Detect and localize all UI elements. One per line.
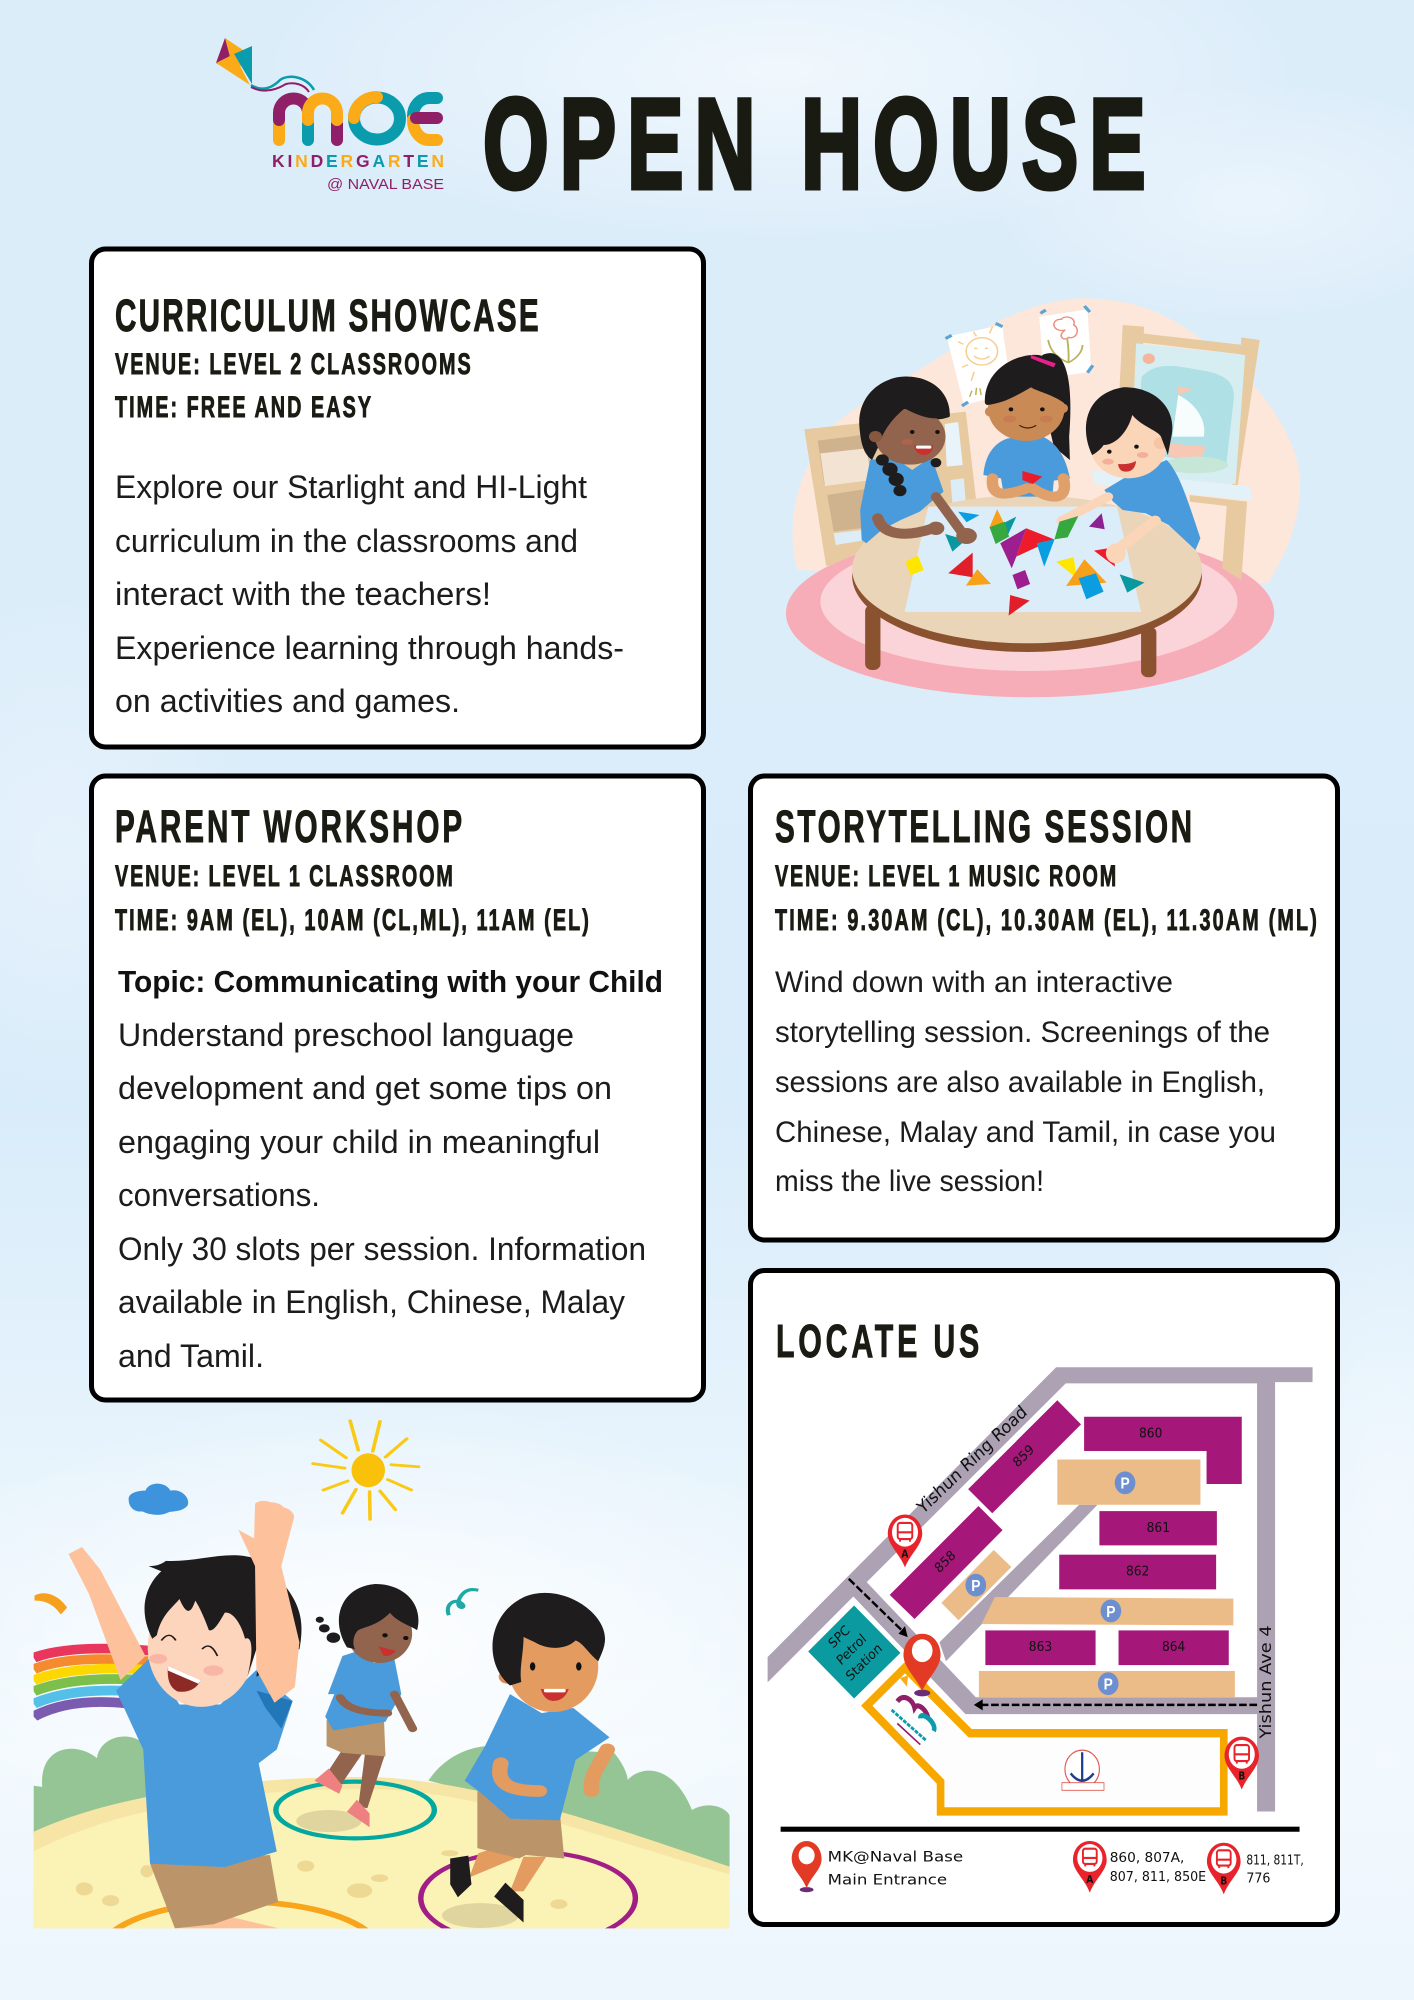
ground <box>34 1777 731 1928</box>
illustration: children playing tangram at a table <box>786 298 1300 697</box>
ground pebbles <box>76 1850 567 1909</box>
legend: main entrance <box>792 1841 963 1892</box>
legend: main entrance: MK@Naval Base <box>828 1849 963 1866</box>
petrol station: Station <box>844 1641 885 1685</box>
map <box>768 1367 1313 1894</box>
building numbers: 858 <box>932 1548 959 1577</box>
panel: locate us <box>750 1270 1338 1924</box>
building numbers: 860 <box>1139 1426 1162 1442</box>
panel: storytelling session <box>750 776 1338 1240</box>
legend: bus stop B services <box>1207 1843 1304 1894</box>
drawing: flower <box>1039 306 1093 375</box>
crayon marks <box>35 1593 67 1615</box>
heading: locate us: LOCATE US <box>776 1317 979 1368</box>
body text: storytelling session. Screenings of the <box>775 1016 1270 1049</box>
building numbers: 863 <box>1029 1640 1052 1655</box>
time line: TIME: 9AM (EL), 10AM (CL,ML), 11AM (EL) <box>115 904 589 937</box>
building numbers <box>932 1426 1185 1655</box>
body text: Wind down with an interactive <box>775 966 1173 999</box>
parking markers <box>965 1471 1135 1695</box>
building numbers: 861 <box>1147 1520 1170 1536</box>
venue line: VENUE: LEVEL 1 CLASSROOM <box>115 860 453 893</box>
logo: MOE Kindergarten at Naval Base <box>216 38 444 193</box>
venue line: VENUE: LEVEL 1 MUSIC ROOM <box>775 860 1116 893</box>
petrol station: SPC <box>826 1623 853 1652</box>
child: middle girl <box>983 353 1070 497</box>
legend: bus stop B services: 811, 811T, <box>1246 1853 1304 1869</box>
legend: bus stop B services: B <box>1220 1876 1227 1888</box>
child: big boy <box>68 1501 301 1928</box>
time line: TIME: FREE AND EASY <box>115 391 371 424</box>
wordmark letters moe <box>279 97 437 140</box>
heading: storytelling session: STORYTELLING SESSION <box>775 802 1192 853</box>
panel: parent workshop <box>92 776 704 1400</box>
parking markers: P <box>1120 1476 1130 1493</box>
body text: engaging your child in meaningful <box>118 1124 600 1160</box>
icon: kite <box>216 38 314 92</box>
body text: miss the live session! <box>775 1165 1044 1198</box>
body text: available in English, Chinese, Malay <box>118 1284 625 1320</box>
topic line: Topic: Communicating with your Child <box>118 964 663 999</box>
rainbow <box>34 1649 152 1717</box>
drawing: sun <box>946 323 1012 406</box>
easel with painting <box>1092 325 1260 580</box>
building numbers: 859 <box>1011 1442 1037 1471</box>
body text: sessions are also available in English, <box>775 1066 1265 1099</box>
parking markers: P <box>1106 1604 1116 1621</box>
cloud <box>129 1484 188 1515</box>
roads <box>768 1367 1313 1811</box>
body text <box>115 469 624 719</box>
illustration: children jumping in hoops <box>34 1419 730 1928</box>
body text: and Tamil. <box>118 1338 264 1374</box>
parking markers: P <box>971 1578 981 1595</box>
child: right boy <box>450 1593 610 1922</box>
legend: bus stop B services: 776 <box>1246 1871 1270 1887</box>
building numbers: 864 <box>1162 1640 1185 1655</box>
tangram pieces <box>905 509 1145 616</box>
heading: curriculum showcase: CURRICULUM SHOWCASE <box>115 291 539 342</box>
buildings <box>890 1400 1242 1665</box>
hoops <box>112 1780 638 1928</box>
panel: curriculum showcase <box>92 249 704 747</box>
body text: conversations. <box>118 1177 320 1213</box>
petrol station <box>808 1605 900 1698</box>
venue line: VENUE: LEVEL 2 CLASSROOMS <box>115 348 471 381</box>
school crest <box>1062 1750 1104 1790</box>
wordmark naval base: @ NAVAL BASE <box>327 177 444 193</box>
body text: interact with the teachers! <box>115 576 491 612</box>
petrol station: Petrol <box>834 1631 870 1669</box>
body text: Chinese, Malay and Tamil, in case you <box>775 1116 1276 1149</box>
icon: bus stop A: A <box>901 1549 909 1561</box>
dashed route arrows <box>849 1579 1257 1710</box>
body text: Only 30 slots per session. Information <box>118 1231 646 1267</box>
icon: bus stop B: B <box>1238 1771 1245 1783</box>
title: OPEN HOUSE <box>483 72 1146 215</box>
legend: bus stop A services: 807, 811, 850E <box>1110 1870 1206 1885</box>
map: Yishun Ave 4 <box>1256 1625 1275 1740</box>
legend: main entrance: Main Entrance <box>828 1872 947 1889</box>
body text <box>775 966 1276 1198</box>
body text: on activities and games. <box>115 683 460 719</box>
road labels: Yishun Ring Road <box>912 1401 1031 1518</box>
body text: Explore our Starlight and HI-Light <box>115 469 587 505</box>
icon: bus stop B <box>1225 1737 1259 1789</box>
body text: Understand preschool language <box>118 1017 574 1053</box>
wordmark kindergarten: KINDERGARTEN <box>272 151 444 171</box>
child: small girl <box>314 1584 418 1827</box>
body text <box>118 1017 646 1374</box>
child: left girl <box>859 377 977 544</box>
time line: TIME: 9.30AM (CL), 10.30AM (EL), 11.30AM (ML) <box>775 904 1317 937</box>
building numbers: 862 <box>1126 1564 1149 1580</box>
legend: bus stop A services: 860, 807A, <box>1110 1851 1184 1866</box>
bushes <box>34 1736 146 1836</box>
table <box>852 495 1202 677</box>
icon: bus stop A <box>888 1514 922 1567</box>
parking markers: P <box>1104 1677 1113 1694</box>
shelf <box>804 412 976 566</box>
body text: development and get some tips on <box>118 1070 612 1106</box>
icon: main entrance pin <box>903 1634 941 1696</box>
body text: Experience learning through hands- <box>115 630 624 666</box>
heading: parent workshop: PARENT WORKSHOP <box>115 802 462 853</box>
mini logo <box>892 1675 934 1745</box>
body text: curriculum in the classrooms and <box>115 523 578 559</box>
legend: bus stop A services: A <box>1086 1875 1094 1886</box>
school compound <box>867 1668 1224 1811</box>
legend divider <box>781 1827 1300 1832</box>
legend: bus stop A services <box>1073 1841 1206 1893</box>
child: right boy <box>1055 387 1200 563</box>
parking areas <box>941 1460 1235 1697</box>
sun <box>313 1421 419 1519</box>
